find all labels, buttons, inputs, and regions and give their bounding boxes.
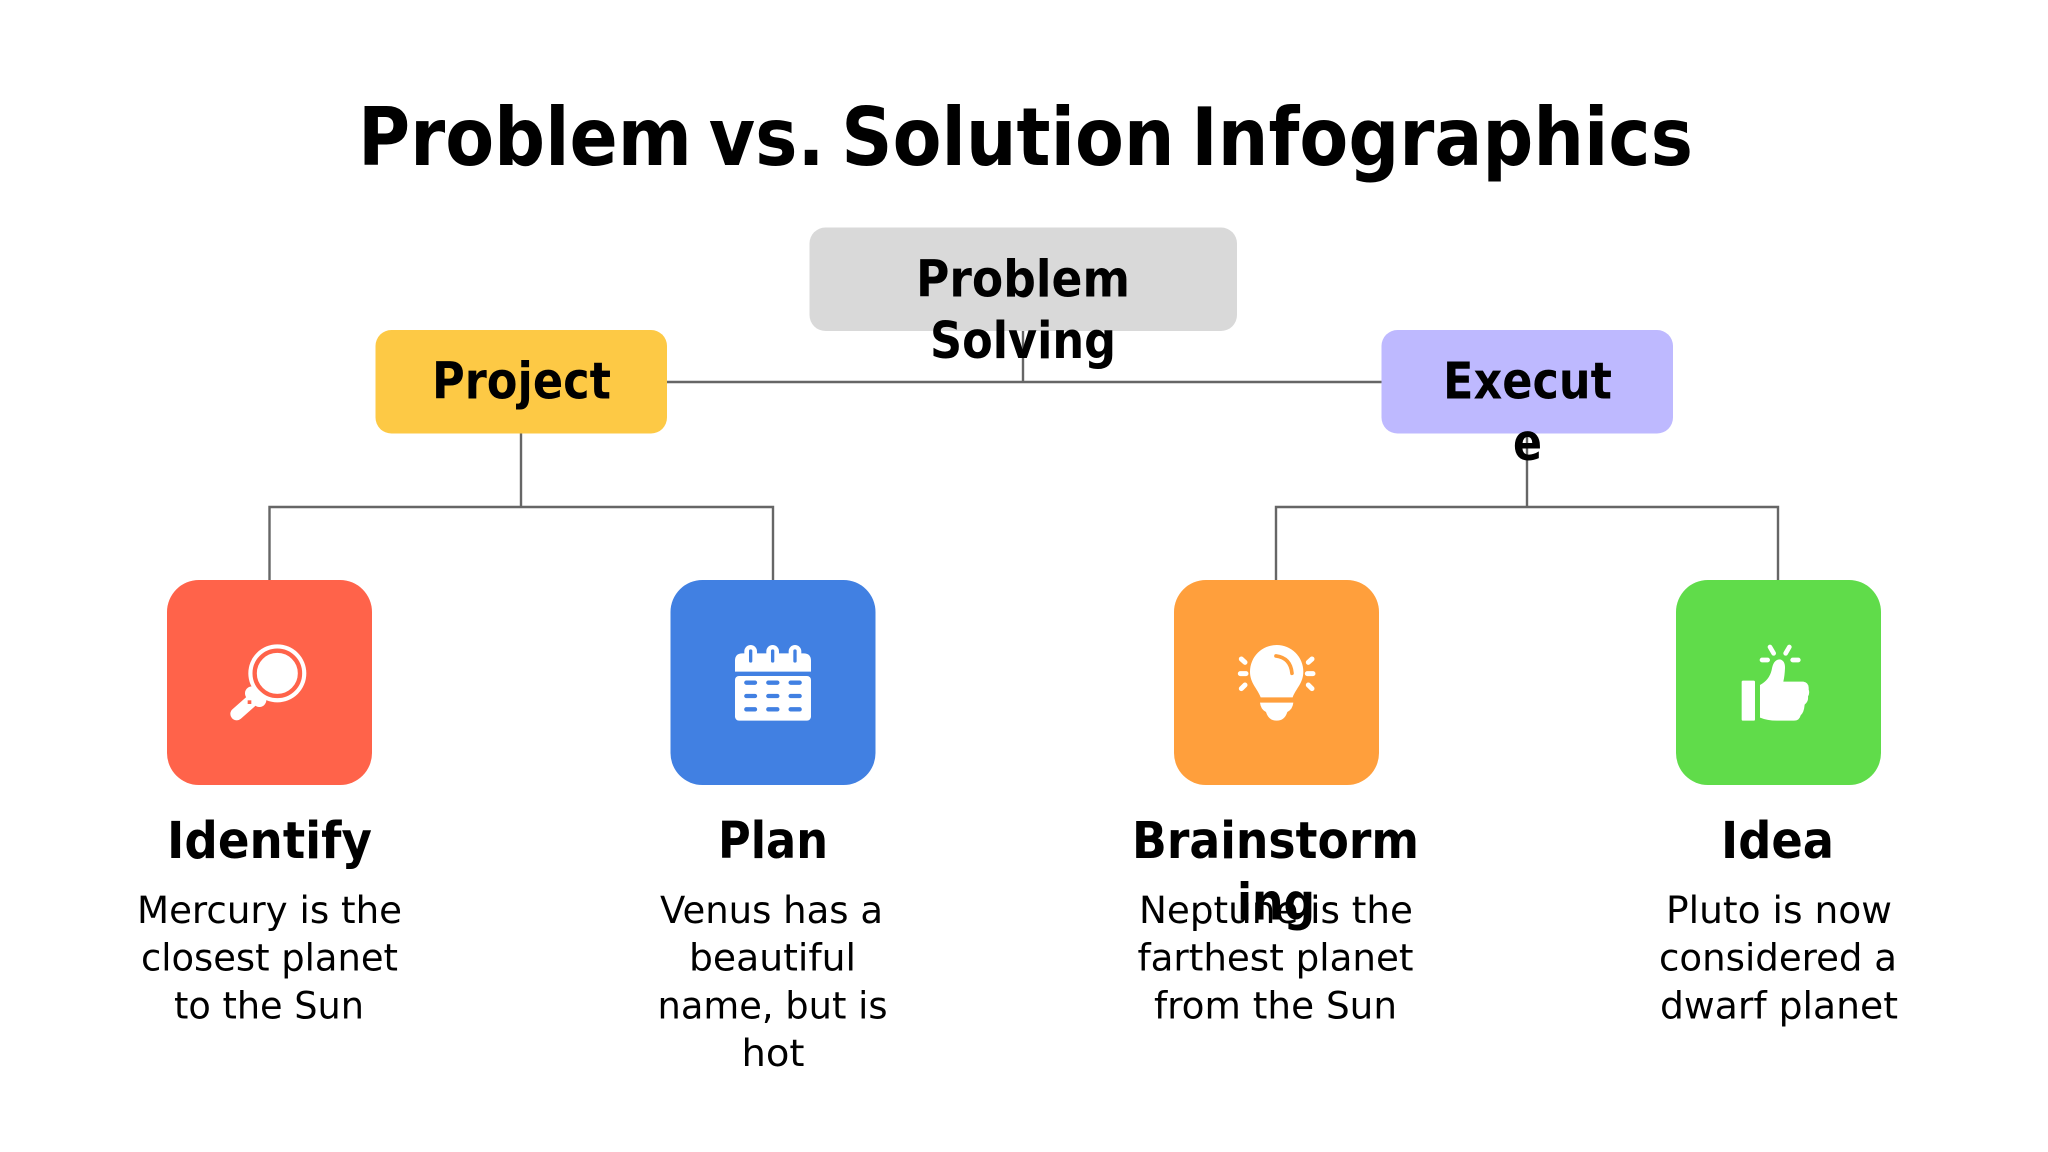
column: Idea [1659, 580, 1898, 1028]
text: Identify description: Mercury is the [137, 888, 402, 932]
title: Problem vs. Solution Infographics [358, 91, 1693, 184]
connector lines [270, 331, 1778, 580]
column: Brainstorming [1132, 580, 1419, 1028]
box: Project: Project [432, 352, 611, 412]
text: Brainstorming description: Neptune is the [1139, 888, 1413, 932]
box: Execute [1382, 330, 1673, 473]
card: blue [670, 580, 876, 785]
column: Identify [137, 580, 402, 1028]
box: Execute: Execut [1443, 352, 1612, 412]
text: Plan description: hot [742, 1031, 804, 1075]
card: red [167, 580, 372, 785]
text: Idea description: Pluto is now [1666, 888, 1892, 932]
text: Brainstorming description: from the Sun [1154, 984, 1397, 1028]
text: Plan description: name, but is [658, 984, 888, 1028]
box: Project [376, 330, 667, 434]
icon: magnifying glass [237, 644, 306, 714]
heading: Idea: Idea [1721, 812, 1834, 871]
text: Identify description: to the Sun [174, 984, 364, 1028]
heading: Plan: Plan [718, 812, 828, 871]
text: Identify description [137, 888, 402, 1028]
text: Idea description: considered a [1659, 936, 1897, 980]
icon: calendar [735, 645, 811, 721]
box: Problem Solving: Problem [916, 250, 1130, 310]
text: Plan description [658, 888, 888, 1075]
box: Execute: e [1513, 414, 1542, 473]
heading: Identify: Identify [167, 812, 372, 871]
text: Idea description [1659, 888, 1898, 1028]
text: Idea description: dwarf planet [1660, 984, 1898, 1028]
column: Plan [658, 580, 888, 1075]
text: Brainstorming description [1138, 888, 1414, 1028]
heading: Brainstorming: ing [1237, 874, 1315, 932]
heading: Brainstorming [1132, 812, 1419, 932]
heading: Brainstorming: Brainstorm [1132, 812, 1419, 871]
card: orange [1174, 580, 1379, 785]
box: Problem Solving [810, 228, 1237, 371]
text: Plan description: Venus has a [660, 888, 883, 932]
text: Plan description: beautiful [689, 936, 856, 980]
text: Brainstorming description: farthest planet [1138, 936, 1414, 980]
box: Problem Solving: Solving [930, 312, 1116, 371]
text: Identify description: closest planet [141, 936, 398, 980]
icon: light bulb [1240, 645, 1313, 721]
card: green [1676, 580, 1881, 785]
icon: thumbs up [1742, 647, 1809, 721]
